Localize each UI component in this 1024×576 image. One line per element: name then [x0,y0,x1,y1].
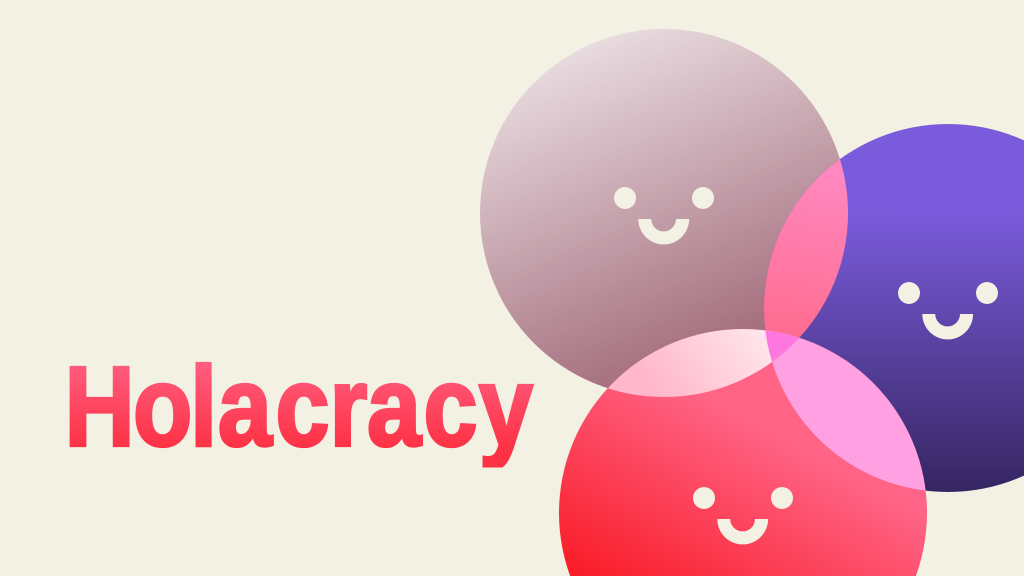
circle: purple [764,124,1024,492]
face: red circle [693,487,793,544]
overlap: purple and red [766,330,926,490]
circle: red [559,329,927,576]
overlap: mauve and purple [764,159,848,338]
title: Holacracy: Holacracy [65,345,533,470]
face: purple circle [898,282,998,339]
circle: mauve [480,29,848,397]
overlap: all three circles [766,330,799,362]
overlap: mauve and red [608,329,800,397]
face: mauve circle [614,187,714,244]
